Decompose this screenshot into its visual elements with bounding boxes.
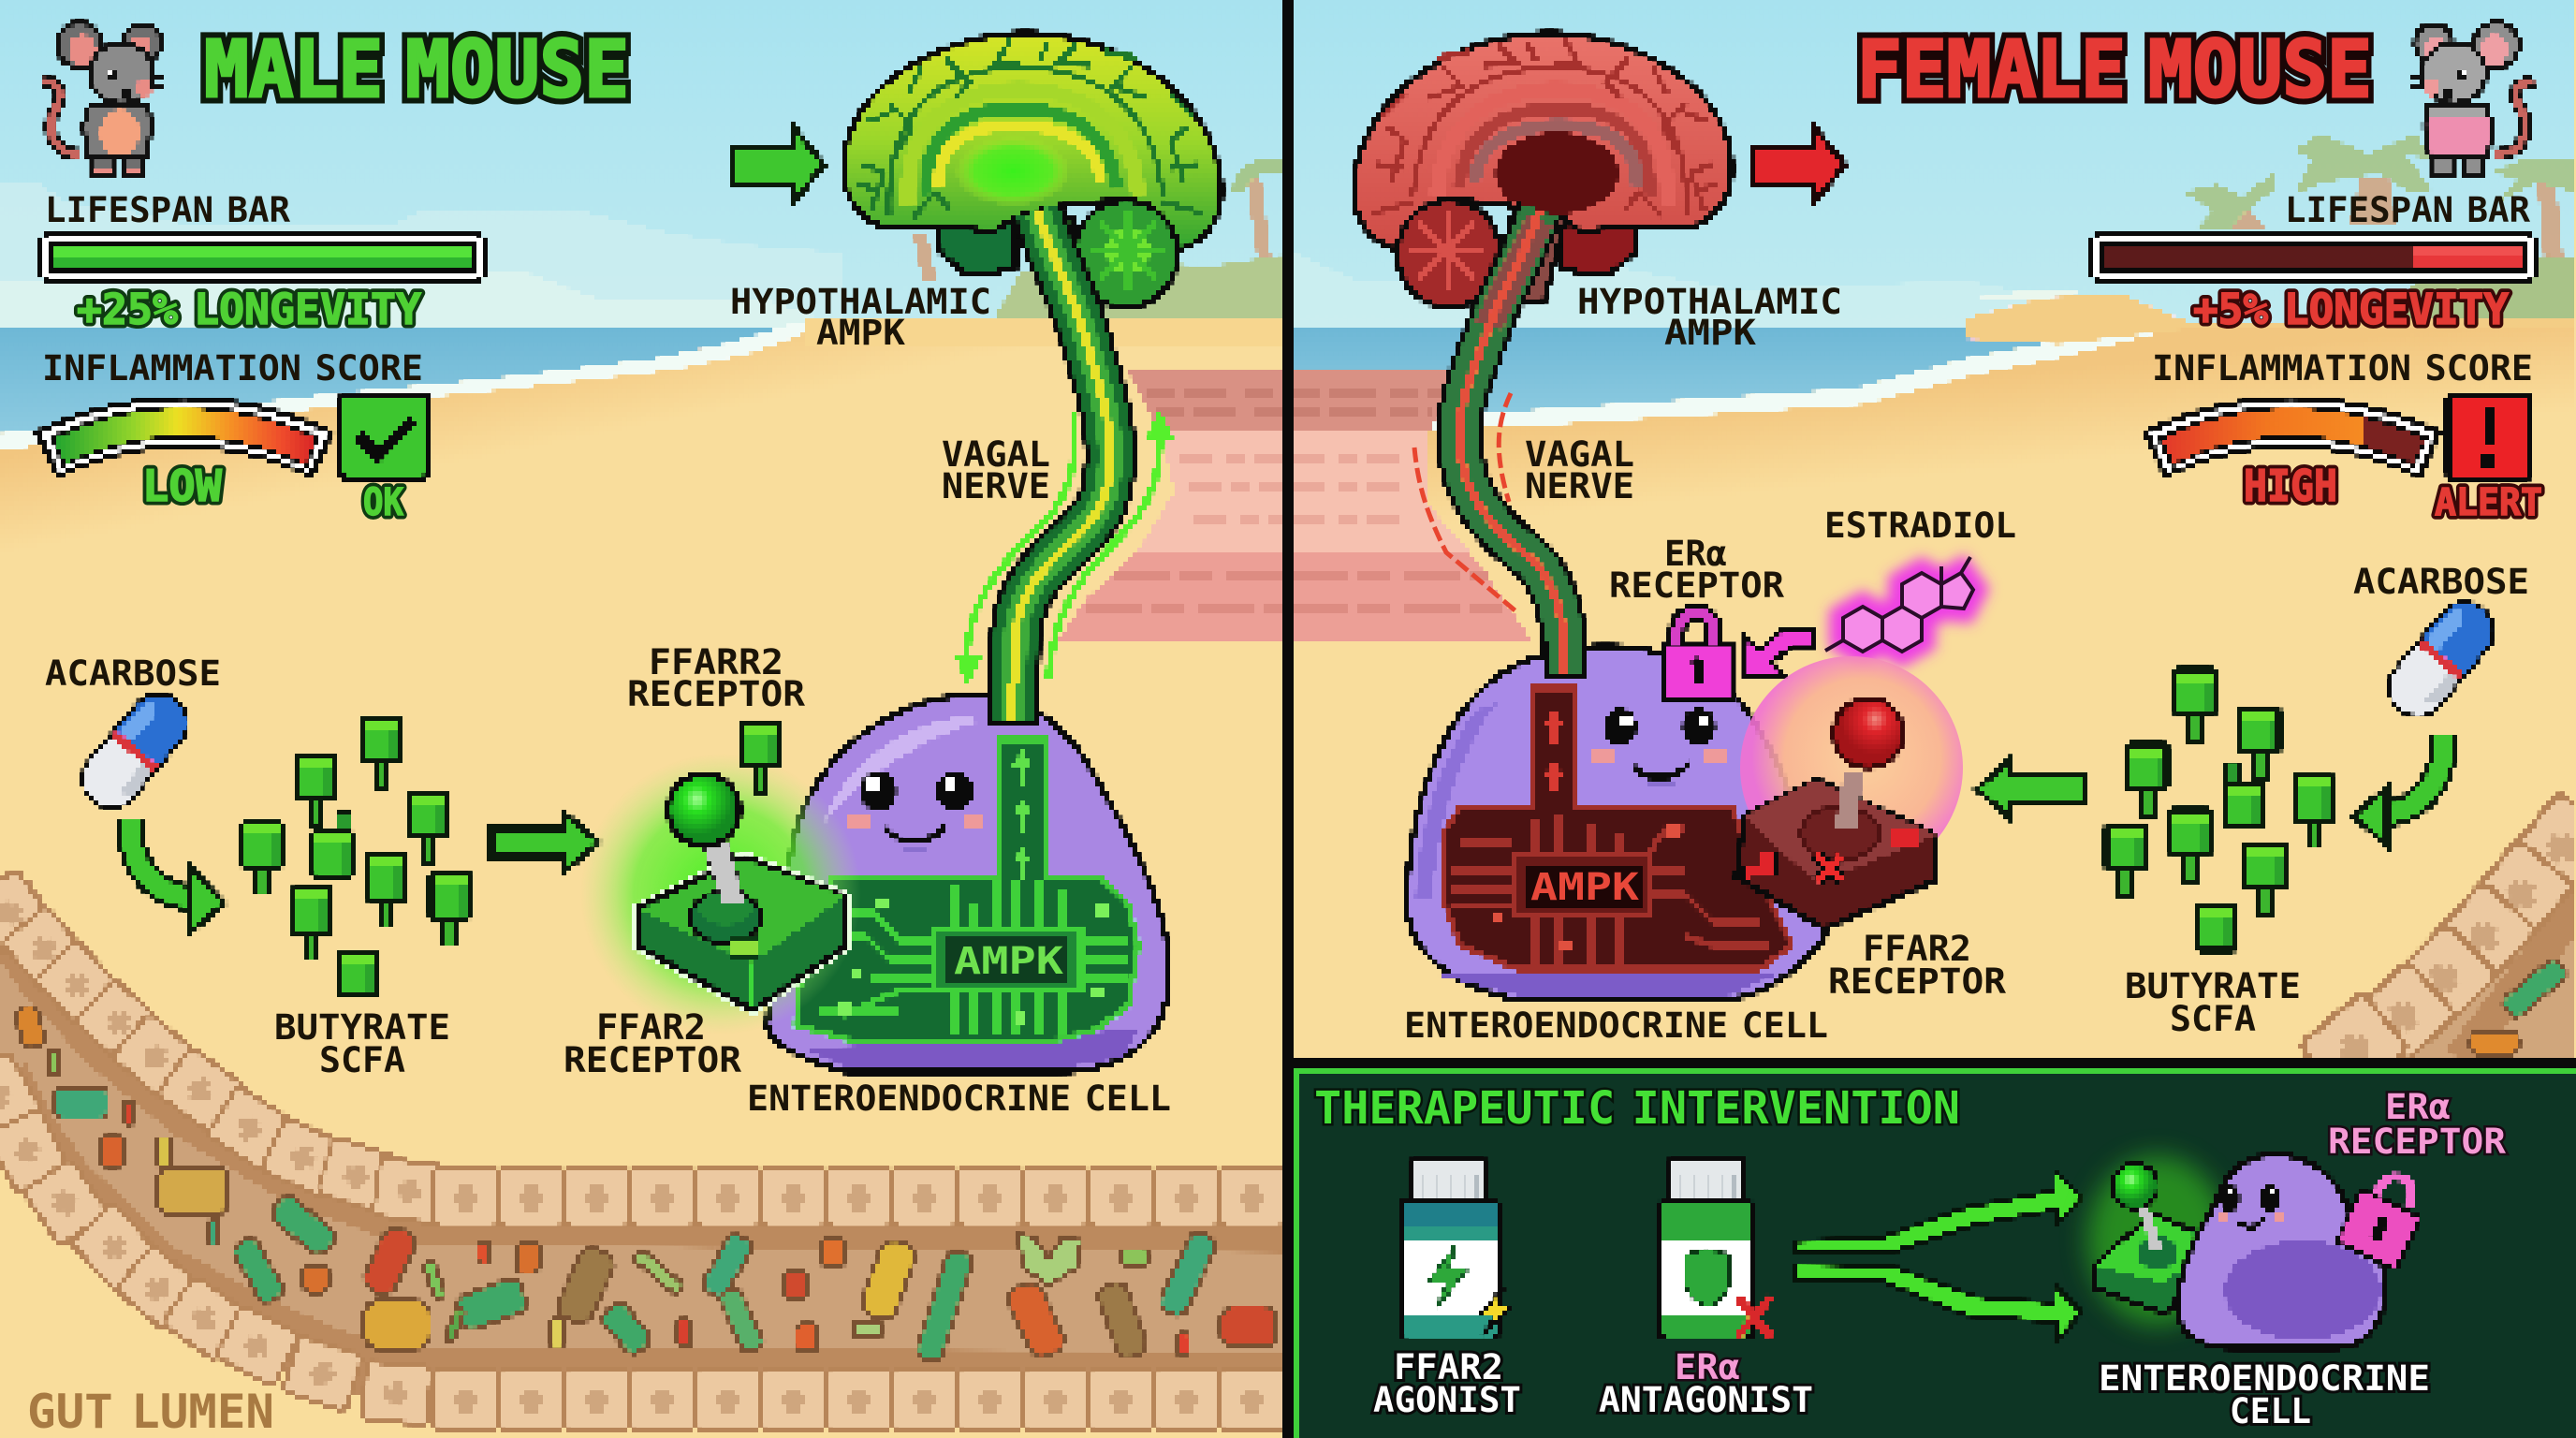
label: ffar2 agonist: AGONIST <box>1373 1380 1521 1420</box>
label: ffarr2 receptor (top) <box>627 642 806 714</box>
brain: male hypothalamus <box>843 33 1222 307</box>
mini joystick with glow <box>2087 1156 2228 1325</box>
label: butyrate scfa (male) <box>274 1007 450 1080</box>
heading: THERAPEUTIC INTERVENTION <box>1314 1082 1960 1135</box>
icon: estradiol molecule <box>1825 557 1973 652</box>
arrow: acarbose to butyrate (female) <box>2353 735 2444 845</box>
label: er alpha antagonist <box>1599 1347 1813 1420</box>
icon: butyrate molecules (male) <box>242 717 470 996</box>
label: enteroendocrine cell (panel) <box>2099 1358 2430 1431</box>
stat: alert: ALERT <box>2435 481 2542 524</box>
cell body <box>1407 641 1825 1000</box>
label: ffar2 receptor (female) <box>1828 929 2007 1002</box>
gauge: low inflammation <box>45 422 324 455</box>
nerve: female vagal nerve <box>1459 211 1566 669</box>
arrow: estradiol to lock <box>1746 629 1813 676</box>
label: hypothalamic ampk (female): HYPOTHALAMIC <box>1577 282 1842 322</box>
text: ampk chip (female): AMPK <box>1530 866 1639 909</box>
panel: male mouse <box>37 22 629 524</box>
label: inflammation score (female): INFLAMMATION SCORE <box>2152 348 2533 389</box>
label: hypothalamic ampk (female): AMPK <box>1664 313 1757 353</box>
label: ffar2 receptor (female): RECEPTOR <box>1828 961 2007 1002</box>
icon: ER alpha antagonist bottle <box>1658 1159 1771 1341</box>
label: er alpha antagonist: ERα <box>1675 1347 1740 1387</box>
label: er alpha antagonist: ANTAGONIST <box>1599 1380 1813 1420</box>
label: ffar2 receptor (male) <box>564 1007 742 1080</box>
arrow: acarbose to butyrate (male) <box>129 820 225 932</box>
label: enteroendocrine cell (female): ENTEROENDOCRINE CELL <box>1404 1005 1828 1046</box>
icon: female mouse <box>2411 22 2534 176</box>
arrow: female brain deactivated <box>1753 126 1845 203</box>
stat: high: HIGH <box>2244 461 2337 511</box>
label: er alpha receptor (panel) <box>2328 1087 2507 1162</box>
text: ampk chip: AMPK <box>954 940 1063 983</box>
label: lifespan bar: LIFESPAN BAR <box>45 190 291 230</box>
icon: ok check box <box>341 394 428 478</box>
title: female mouse: FEMALE MOUSE <box>1857 23 2372 115</box>
label: er alpha receptor (panel): RECEPTOR <box>2328 1122 2507 1162</box>
pink rocky path: right half <box>1294 372 1532 641</box>
label: butyrate scfa (female): BUTYRATE <box>2125 966 2301 1006</box>
label: hypothalamic ampk (male): HYPOTHALAMIC <box>730 282 991 322</box>
joystick body <box>637 774 846 1010</box>
icon: acarbose pill (female) <box>2379 593 2503 726</box>
pink rocky path: left half <box>1058 372 1282 641</box>
arrow: butyrate to receptor <box>491 813 599 872</box>
gut bacteria <box>14 1005 1277 1363</box>
label: ffar2 receptor (male): FFAR2 <box>596 1007 706 1048</box>
gut tube: lumen and epithelial walls (left) <box>0 870 1285 1429</box>
icon: FFAR2 agonist bottle <box>1398 1159 1513 1341</box>
stat: low: LOW <box>142 461 222 511</box>
joystick: blocked FFAR2 receptor (female) <box>1736 656 1963 929</box>
icon: acarbose pill (male) <box>73 684 197 817</box>
label: hypothalamic ampk (male): AMPK <box>816 313 906 353</box>
stat: ok: OK <box>363 481 403 524</box>
gauge: high inflammation <box>2153 422 2432 455</box>
label: hypothalamic ampk (female) <box>1577 282 1842 353</box>
label: acarbose (female): ACARBOSE <box>2353 562 2529 602</box>
gut tube corner (right) <box>2300 793 2576 1101</box>
decorative palm trees <box>914 134 2576 281</box>
stat: +5% longevity: +5% LONGEVITY <box>2193 285 2509 334</box>
label: butyrate scfa (female) <box>2125 966 2301 1039</box>
label: er alpha receptor (female) <box>1609 534 1785 606</box>
title: male mouse: MALE MOUSE <box>204 23 629 115</box>
brain: female hypothalamus <box>1354 33 1732 307</box>
arrows: vagal signal (male) <box>957 412 1172 683</box>
icon: male mouse <box>42 22 165 176</box>
label: vagal nerve (female) <box>1525 434 1634 506</box>
label: hypothalamic ampk (male) <box>730 282 991 353</box>
joystick body <box>1736 698 1936 929</box>
label: ffarr2 receptor (top): FFARR2 <box>649 642 783 682</box>
label: estradiol: ESTRADIOL <box>1824 506 2016 546</box>
arrow: male brain activation <box>733 126 824 203</box>
panel: female mouse <box>1857 22 2542 524</box>
label: ffar2 receptor (male): RECEPTOR <box>564 1040 742 1080</box>
label: vagal nerve (female): NERVE <box>1525 466 1634 506</box>
pink blockade bubble <box>1740 656 1963 879</box>
label: butyrate scfa (male): SCFA <box>319 1040 405 1080</box>
label: vagal nerve (male): NERVE <box>942 466 1050 506</box>
icon: butyrate molecules (female) <box>2106 669 2334 950</box>
label: ffarr2 receptor (top): RECEPTOR <box>627 674 806 714</box>
lifespan bar: mostly empty red <box>2088 231 2539 284</box>
nerve: male vagal nerve <box>1013 211 1110 721</box>
label: er alpha receptor (female): ERα <box>1664 534 1727 574</box>
label: ffar2 agonist: FFAR2 <box>1394 1347 1503 1387</box>
stat: high: HIGH <box>2244 461 2337 511</box>
centre divider <box>1282 0 1294 1438</box>
label: er alpha receptor (female): RECEPTOR <box>1609 565 1785 606</box>
signal: weak red traces (female) <box>1414 393 1518 613</box>
label: gut lumen: GUT LUMEN <box>27 1385 274 1438</box>
label: enteroendocrine cell (male): ENTEROENDOCRINE CELL <box>747 1078 1171 1119</box>
panel: therapeutic intervention <box>1294 1058 2576 1438</box>
label: butyrate scfa (male): BUTYRATE <box>274 1007 450 1048</box>
label: ffar2 agonist <box>1373 1347 1521 1420</box>
stat: ok: OK <box>363 481 403 524</box>
label: acarbose (male): ACARBOSE <box>45 653 221 694</box>
stat: +5% longevity: +5% LONGEVITY <box>2193 285 2509 334</box>
lifespan bar: full green <box>37 231 488 284</box>
label: lifespan bar (female): LIFESPAN BAR <box>2285 190 2531 230</box>
icon: ER alpha lock <box>1664 613 1732 698</box>
label: enteroendocrine cell (panel): ENTEROENDOCRINE <box>2099 1358 2430 1399</box>
arrow: butyrate toward cell (female) <box>1977 759 2086 818</box>
label: enteroendocrine cell (panel): CELL <box>2230 1391 2311 1431</box>
enteroendocrine cell: male <box>768 683 1169 1072</box>
stat: alert: ALERT <box>2435 481 2542 524</box>
arrows: drugs to target <box>1795 1170 2082 1342</box>
joystick: active FFAR2 receptor (male) <box>580 754 861 1034</box>
label: inflammation score: INFLAMMATION SCORE <box>42 348 423 389</box>
mini pink lock <box>2336 1165 2432 1269</box>
enteroendocrine cell: female <box>1407 641 1825 1000</box>
label: ffar2 receptor (female): FFAR2 <box>1863 929 1971 969</box>
label: vagal nerve (male) <box>942 434 1050 506</box>
stat: +25% longevity: +25% LONGEVITY <box>77 285 421 334</box>
panel background <box>1294 1058 2576 1438</box>
icon: scfa near receptor <box>741 722 781 795</box>
stat: low: LOW <box>142 461 222 511</box>
label: vagal nerve (female): VAGAL <box>1525 434 1634 475</box>
mini enteroendocrine cell <box>2176 1154 2385 1348</box>
title: male mouse: MALE MOUSE <box>204 23 629 115</box>
cell body <box>768 683 1169 1072</box>
label: butyrate scfa (female): SCFA <box>2170 999 2256 1039</box>
label: vagal nerve (male): VAGAL <box>942 434 1050 475</box>
stat: +25% longevity: +25% LONGEVITY <box>77 285 421 334</box>
title: female mouse: FEMALE MOUSE <box>1857 23 2372 115</box>
icon: alert box <box>2448 394 2531 478</box>
glow <box>580 754 861 1034</box>
label: er alpha receptor (panel): ERα <box>2385 1087 2451 1127</box>
